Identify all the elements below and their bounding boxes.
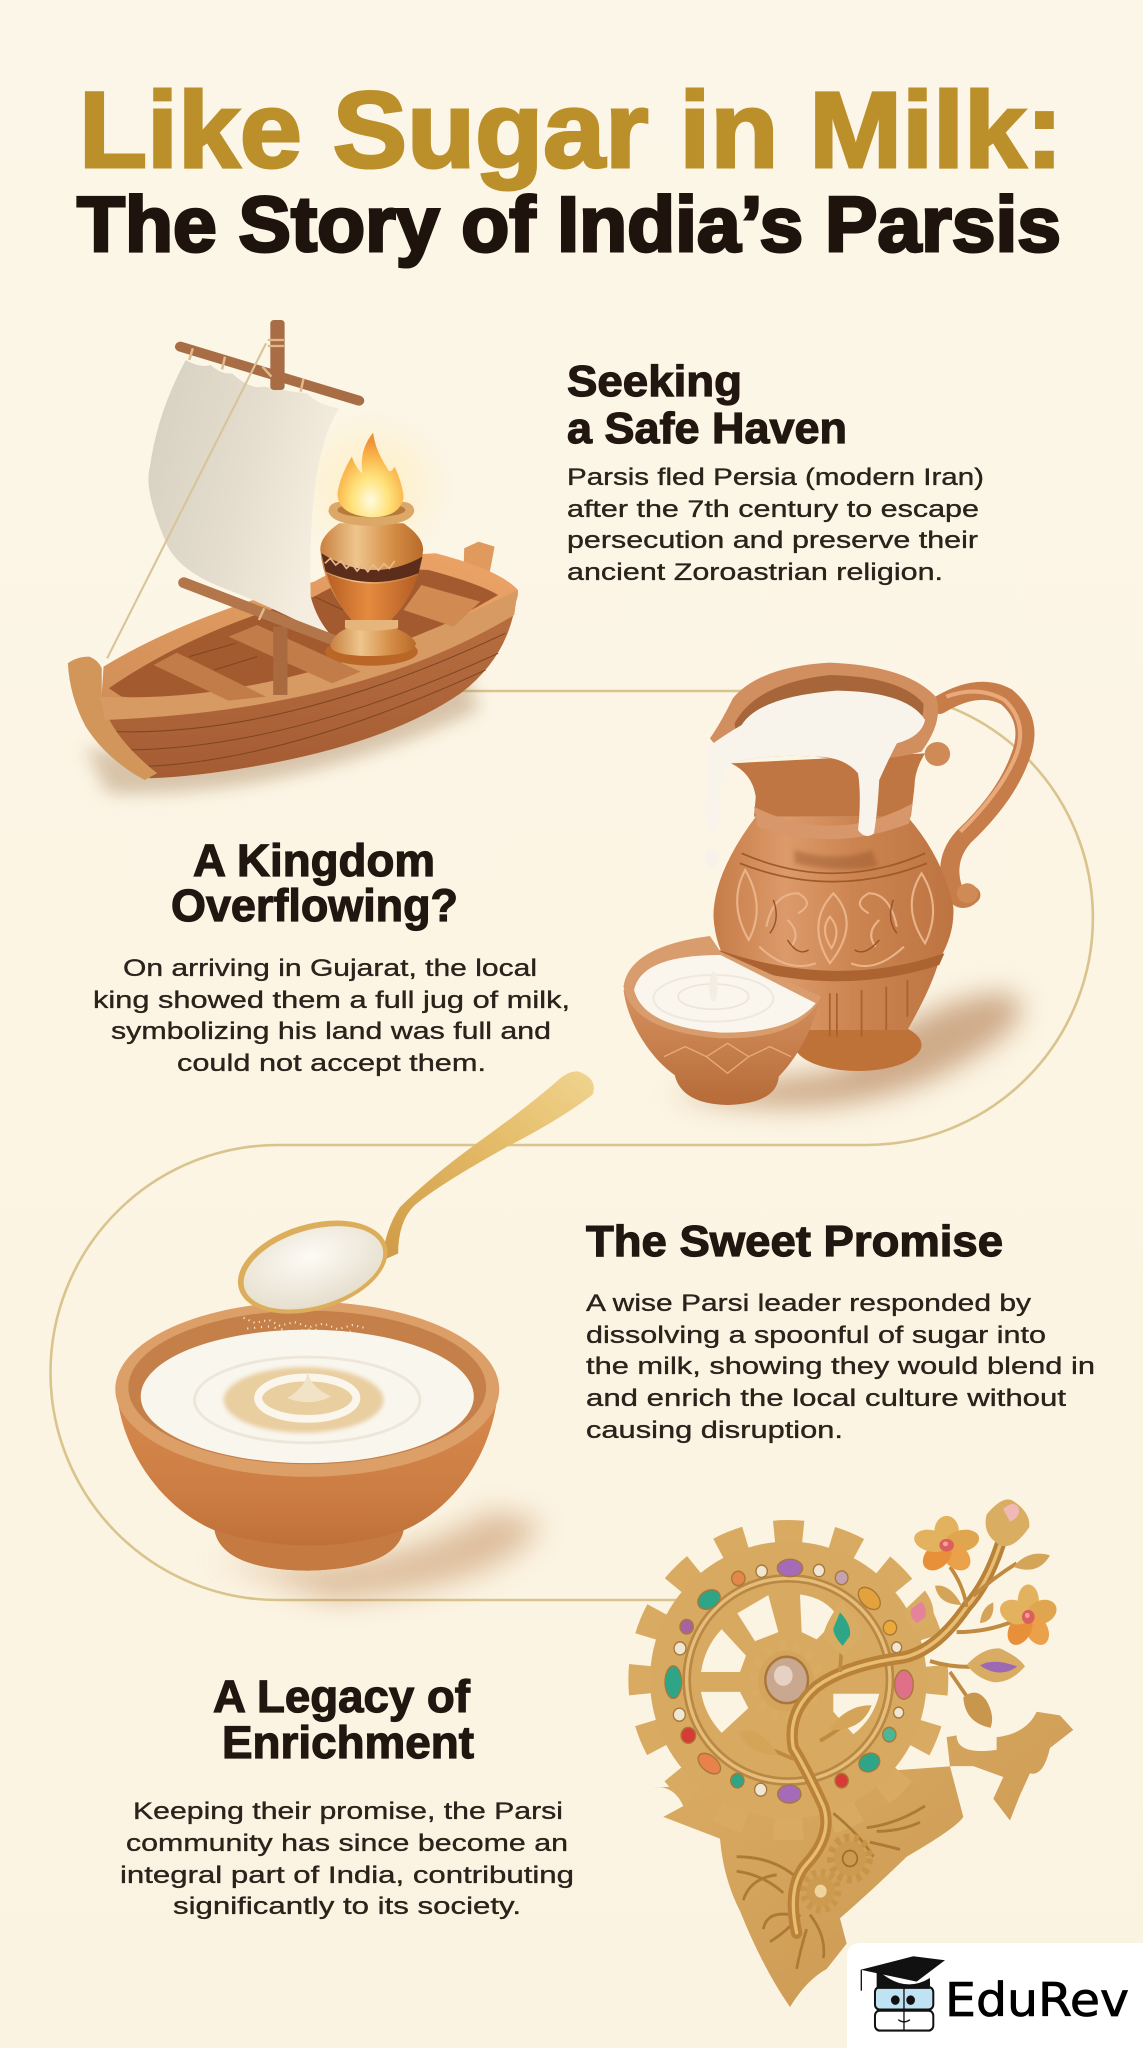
wheel openings — [737, 1595, 778, 1641]
icon: wooden boat with sail and sacred fire urn — [68, 320, 518, 794]
icon: gear, tree and map of India — [642, 1499, 1073, 2007]
text block: the sweet promise — [586, 1290, 1095, 1444]
text block: a legacy of enrichment: integral part of India, contributing — [120, 1862, 574, 1889]
text block: seeking a safe haven: Parsis fled Persia (modern Iran) — [567, 464, 984, 491]
logo: EduRev — [847, 1943, 1143, 2048]
title — [77, 69, 1063, 268]
tree roots — [737, 1806, 925, 1969]
heading: a kingdom overflowing: Overflowing? — [171, 880, 458, 931]
icon: copper bowl of milk with spoon of sugar — [115, 1071, 594, 1600]
flowers and bud — [911, 1516, 983, 1575]
text block: a kingdom overflowing: symbolizing his land was full and — [111, 1018, 551, 1045]
connecting gold timeline path — [51, 691, 1093, 1600]
milk overflow — [706, 691, 925, 836]
text block: a legacy of enrichment: community has since become an — [126, 1830, 568, 1857]
heading: a legacy of enrichment: A Legacy of — [213, 1671, 471, 1722]
icon: copper jug overflowing with milk and bowl — [624, 663, 1025, 1107]
gear teeth and wheel — [642, 1533, 935, 1827]
text block: seeking a safe haven — [567, 464, 984, 586]
spoon — [382, 1071, 594, 1261]
text block: a legacy of enrichment: Keeping their promise, the Parsi — [133, 1798, 563, 1825]
logo: EduRev: EduRev — [945, 1973, 1129, 2027]
heading: seeking a safe haven — [567, 357, 847, 453]
gem buds — [824, 1601, 860, 1656]
text block: the sweet promise: and enrich the local culture without — [586, 1385, 1066, 1412]
text block: a kingdom overflowing: could not accept them. — [177, 1050, 486, 1077]
heading: a kingdom overflowing — [171, 835, 458, 931]
text block: a kingdom overflowing: On arriving in Gujarat, the local — [123, 955, 537, 982]
text block: the sweet promise: causing disruption. — [586, 1417, 843, 1444]
icon: graduate mascot — [861, 1956, 945, 2031]
title: Like Sugar in Milk: — [79, 69, 1063, 190]
heading: a legacy of enrichment — [213, 1671, 474, 1768]
text block: a legacy of enrichment — [120, 1798, 574, 1920]
panel: seeking a safe haven — [68, 320, 984, 794]
heading: a legacy of enrichment: Enrichment — [222, 1717, 474, 1768]
text block: seeking a safe haven: after the 7th century to escape — [567, 496, 979, 523]
text block: the sweet promise: the milk, showing they would blend in — [586, 1353, 1095, 1380]
small bowl — [624, 990, 821, 1105]
text block: a kingdom overflowing: king showed them a full jug of milk, — [93, 987, 570, 1014]
panel: a kingdom overflowing — [93, 663, 1025, 1107]
tree trunk and branches — [792, 1545, 1000, 1933]
panel: a legacy of enrichment — [120, 1499, 1073, 2007]
heading: a kingdom overflowing: A Kingdom — [193, 835, 435, 886]
leaves — [1013, 1554, 1050, 1570]
text block: seeking a safe haven: ancient Zoroastrian religion. — [567, 559, 943, 586]
text block: seeking a safe haven: persecution and preserve their — [567, 527, 978, 554]
text block: the sweet promise: A wise Parsi leader responded by — [586, 1290, 1032, 1317]
text block: a legacy of enrichment: significantly to its society. — [173, 1893, 521, 1920]
text block: the sweet promise: dissolving a spoonful of sugar into — [586, 1322, 1046, 1349]
sail — [148, 360, 339, 640]
heading: the sweet promise: The Sweet Promise — [586, 1217, 1003, 1266]
text block: a kingdom overflowing — [93, 955, 570, 1077]
panel: the sweet promise — [115, 1071, 1095, 1600]
small gears on map — [831, 1838, 869, 1879]
fire urn — [325, 638, 418, 666]
title: The Story of India’s Parsis — [77, 180, 1061, 268]
hub — [754, 1647, 818, 1715]
ring of gems — [665, 1559, 913, 1803]
heading: seeking a safe haven: Seeking — [567, 357, 742, 406]
heading: seeking a safe haven: a Safe Haven — [567, 404, 847, 453]
